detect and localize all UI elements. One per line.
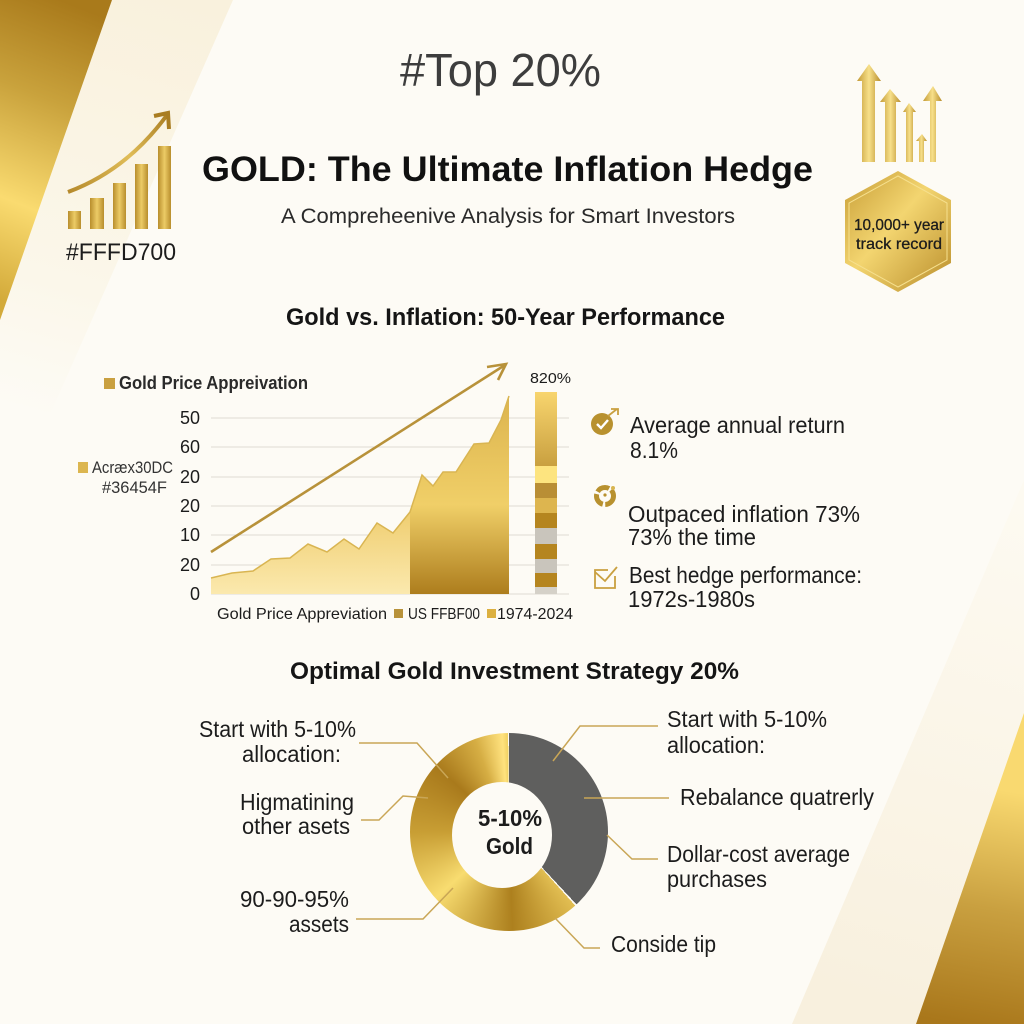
legend: bottom: Gold Price Appreviation [217, 606, 387, 623]
label: dollar-cost average: Dollar-cost average [667, 841, 850, 867]
badge: track record hexagon: 10,000+ year [854, 217, 945, 234]
legend: left [78, 458, 173, 497]
y axis labels [180, 408, 200, 604]
label: other assets: Higmatining [240, 789, 354, 815]
trend arrow [211, 364, 506, 552]
icon: check badge [591, 409, 618, 435]
stat: best hedge performance: 1972s-1980s [628, 586, 755, 612]
stat: outpaced inflation: 73% the time [628, 524, 756, 550]
stat: best hedge performance: Best hedge performance: [629, 562, 862, 588]
label: dollar-cost average: purchases [667, 866, 767, 892]
label: left start allocation [199, 716, 356, 767]
legend: left: Acræx30DC [92, 458, 173, 477]
tag heading: #Top 20% [400, 44, 601, 96]
label: assets share: 90-90-95% [240, 886, 349, 912]
area series: early [211, 512, 410, 594]
y axis labels: 20 [180, 496, 200, 516]
label: right start allocation [667, 706, 827, 758]
donut hole [452, 782, 552, 888]
legend: bottom: 1974-2024 [497, 606, 573, 623]
icon label: #FFFD700 [66, 239, 176, 266]
leader lines [356, 726, 669, 948]
area series: recent [410, 396, 509, 594]
legend: top: Gold Price Appreivation [119, 373, 308, 393]
label: assets share [240, 886, 349, 937]
stacked bar label: 820% [530, 370, 571, 387]
section heading: strategy: Optimal Gold Investment Strategy 20% [290, 658, 739, 685]
y axis labels: 0 [190, 584, 200, 604]
area top line [211, 396, 509, 578]
stat: average annual return: 8.1% [630, 437, 678, 463]
stat: best hedge performance [595, 562, 862, 612]
label: other assets: other asets [242, 813, 350, 839]
stat: average annual return: Average annual return [630, 412, 845, 438]
badge: track record hexagon: track record [856, 236, 942, 253]
chart: gold vs inflation [180, 364, 571, 604]
label: left start allocation: Start with 5-10% [199, 716, 356, 742]
label: right start allocation: allocation: [667, 732, 765, 758]
title: GOLD: The Ultimate Inflation Hedge [202, 150, 813, 189]
section heading: performance: Gold vs. Inflation: 50-Year Performance [286, 304, 725, 331]
label: rebalance: Rebalance quatrerly [680, 784, 874, 810]
y axis labels: 50 [180, 408, 200, 428]
y axis labels: 10 [180, 525, 200, 545]
donut center label: Gold [486, 833, 533, 859]
label: tip: Conside tip [611, 931, 716, 957]
icon: rising bars with arrow [68, 113, 171, 229]
y axis labels: 60 [180, 437, 200, 457]
legend: bottom: US FFBF00 [408, 606, 480, 623]
label: other assets [240, 789, 354, 839]
legend: bottom [217, 606, 573, 623]
y axis labels: 20 [180, 555, 200, 575]
label: right start allocation: Start with 5-10% [667, 706, 827, 732]
legend: left: #36454F [102, 478, 167, 497]
label: dollar-cost average [667, 841, 850, 892]
stacked bar [535, 392, 557, 594]
donut center label: 5-10% [478, 805, 542, 831]
y axis labels: 20 [180, 467, 200, 487]
donut chart [410, 733, 608, 931]
icon: check envelope [595, 567, 617, 588]
stat: outpaced inflation: Outpaced inflation 73% [628, 501, 860, 527]
icon: rising arrows [857, 64, 942, 162]
label: left start allocation: allocation: [242, 741, 341, 767]
stat: outpaced inflation [596, 486, 860, 550]
icon: gold ring [596, 486, 615, 504]
stat: average annual return [591, 409, 845, 463]
subtitle: A Compreheenive Analysis for Smart Investors [281, 205, 735, 228]
donut center label [478, 805, 542, 859]
label: assets share: assets [289, 911, 349, 937]
donut ring [410, 733, 608, 931]
badge: track record hexagon [845, 171, 951, 292]
